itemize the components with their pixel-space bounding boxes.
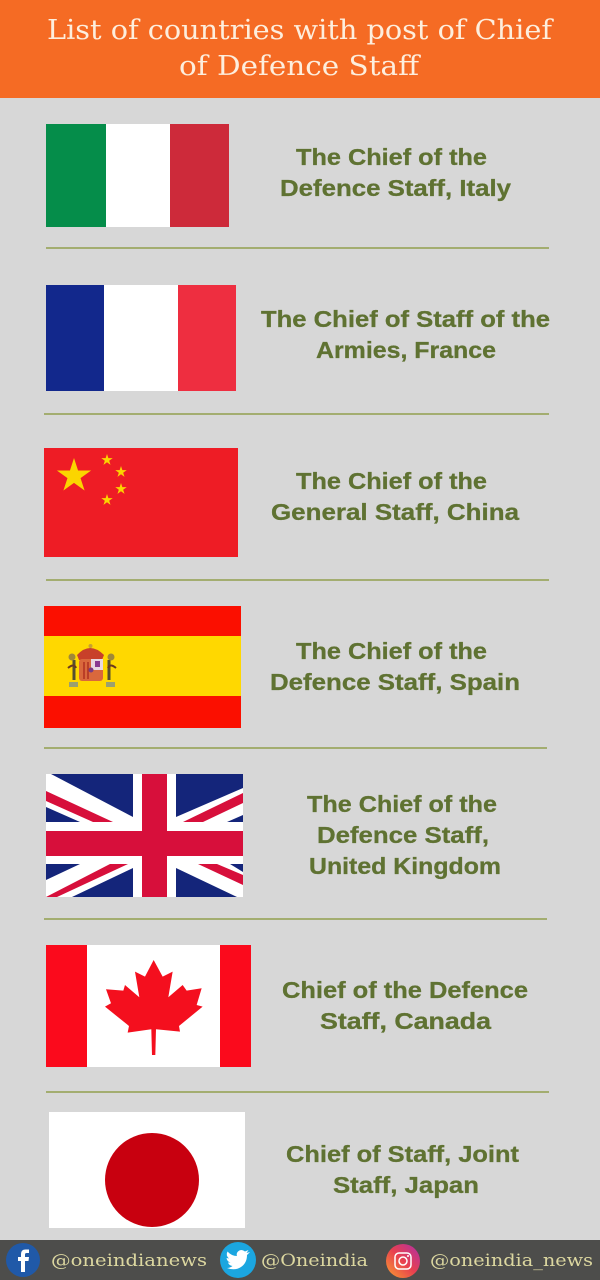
flag: Canada [46, 945, 251, 1067]
label: Italy [280, 144, 511, 201]
label: United Kingdom: The Chief of the [307, 791, 497, 817]
title banner: of Defence Staff [179, 51, 421, 82]
label: China [271, 468, 519, 525]
label: Japan: Staff, Japan [333, 1172, 479, 1198]
label: United Kingdom: Defence Staff, [317, 822, 489, 848]
flag: Spain [44, 606, 241, 728]
label: Canada: Staff, Canada [320, 1008, 491, 1034]
handle: twitter: @Oneindia [261, 1251, 368, 1271]
flag: Japan [49, 1112, 245, 1228]
label: Canada: Chief of the Defence [282, 977, 528, 1003]
label: United Kingdom: United Kingdom [309, 853, 501, 879]
label: China: General Staff, China [271, 499, 519, 525]
label: Spain: Defence Staff, Spain [270, 669, 520, 695]
handle: instagram: @oneindia_news [430, 1251, 593, 1271]
label: France: The Chief of Staff of the [261, 306, 550, 332]
label: China: The Chief of the [296, 468, 487, 494]
label: Spain [270, 638, 520, 695]
label: France [261, 306, 550, 363]
footer social bar [0, 1240, 600, 1280]
flag: United Kingdom [46, 774, 243, 897]
title banner: List of countries with post of Chief [47, 15, 554, 46]
handle: facebook: @oneindianews [51, 1251, 207, 1271]
icon: instagram [386, 1244, 420, 1278]
label: United Kingdom [307, 791, 501, 879]
title banner [0, 0, 600, 98]
label: France: Armies, France [316, 337, 496, 363]
flag: Italy [46, 124, 229, 227]
label: Japan: Chief of Staff, Joint [286, 1141, 519, 1167]
label: Italy: Defence Staff, Italy [280, 175, 511, 201]
label: Italy: The Chief of the [296, 144, 487, 170]
icon: twitter [220, 1242, 256, 1278]
flag: France [46, 285, 236, 391]
label: Spain: The Chief of the [296, 638, 487, 664]
flag: China [44, 448, 238, 557]
label: Canada [282, 977, 528, 1034]
icon: facebook [6, 1243, 40, 1277]
label: Japan [286, 1141, 519, 1198]
